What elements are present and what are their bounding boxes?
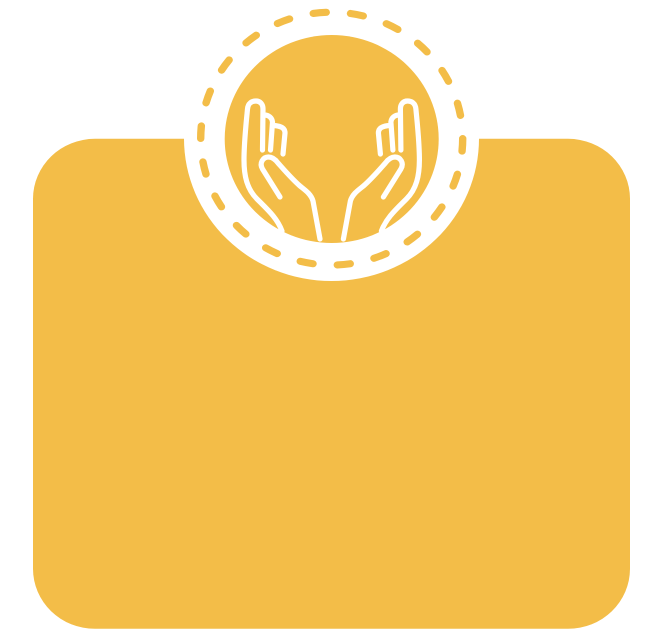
white badge disc: [184, 0, 479, 281]
panel: rounded yellow card: [33, 139, 630, 629]
inner yellow circle: [225, 35, 439, 243]
icon: left hand: [244, 101, 320, 239]
icon: right hand: [343, 101, 419, 239]
badge: white ring with dashes and hands: [184, 0, 479, 281]
dashed ring: [201, 12, 463, 265]
